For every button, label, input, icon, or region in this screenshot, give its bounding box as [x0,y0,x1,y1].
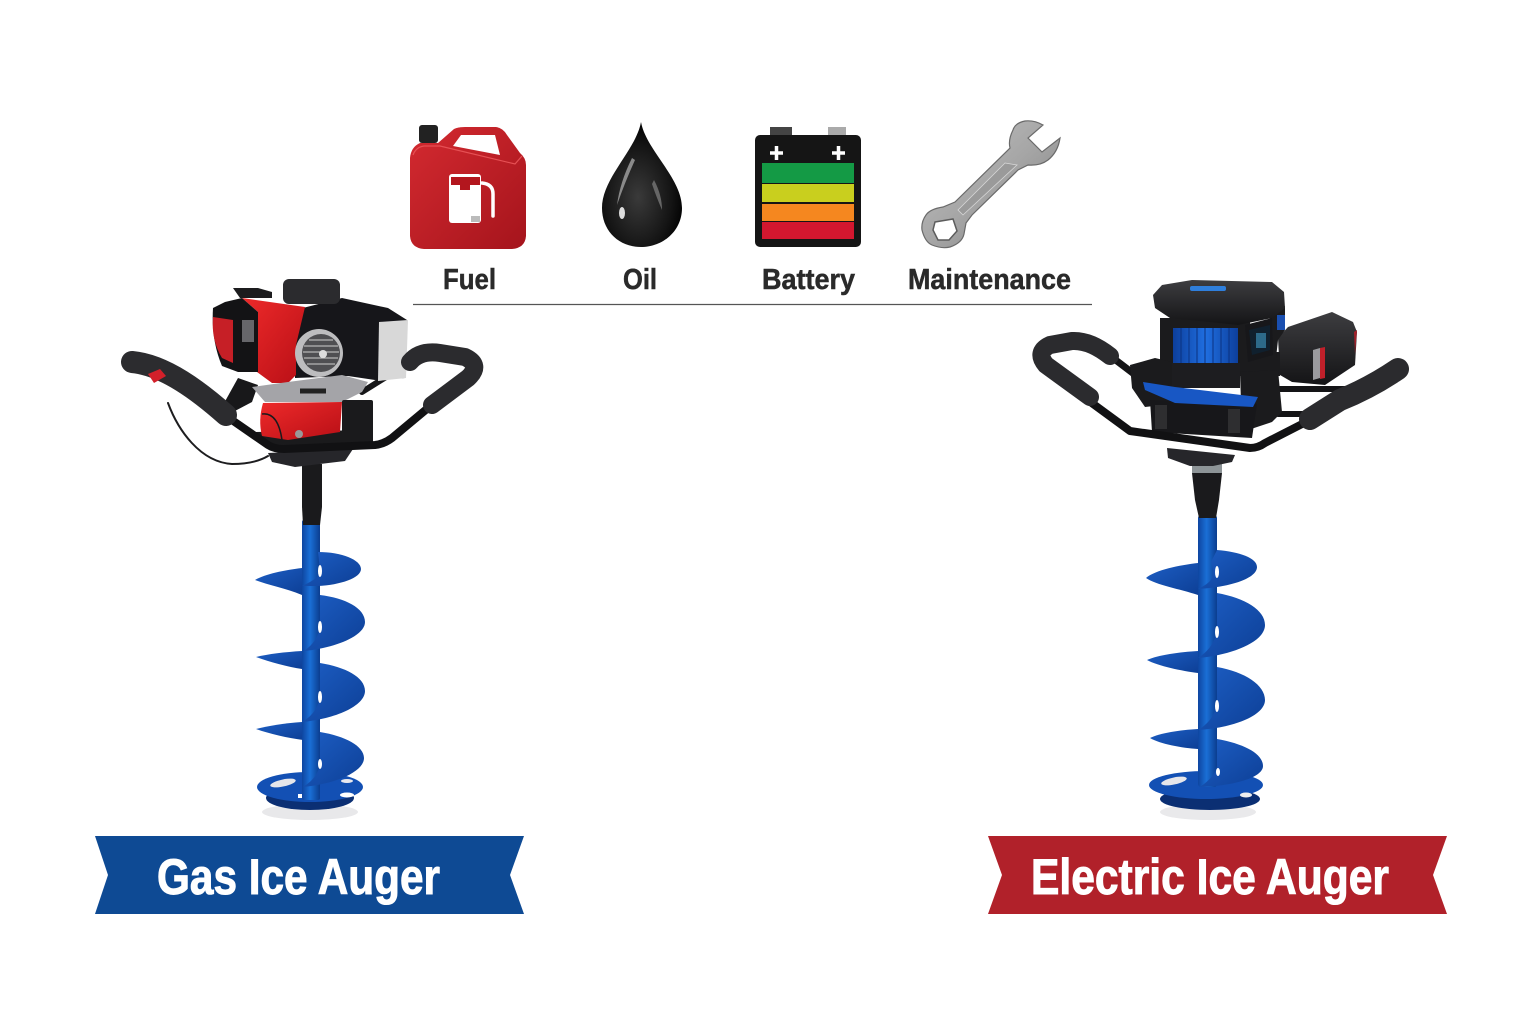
label: Battery: Battery [762,264,855,296]
banner: Electric Ice Auger: Electric Ice Auger [1031,849,1389,905]
label: Fuel: Fuel [443,264,496,296]
illustration: electric ice auger [1041,280,1398,820]
gas auger handlebar and grips [132,352,474,449]
label: Oil: Oil [623,264,657,296]
icon: battery [755,127,861,247]
icon: fuel can [410,125,526,249]
icon: oil drop [602,122,682,247]
electric auger handlebar and grips [1041,341,1398,448]
icon: wrench [922,121,1060,248]
electric auger coupling [1192,464,1222,518]
gas auger mounting plate [268,449,353,467]
electric auger blade and shaft [1146,515,1265,820]
electric auger rear tubes [1113,358,1353,414]
electric battery pack [1278,312,1357,385]
gas auger coupling [302,464,322,525]
icon row: consumables [410,121,1092,304]
electric motor housing [1130,280,1285,438]
electric auger mounting plate [1167,448,1235,466]
gas auger handlebar rear tubes and cable [168,362,410,464]
illustration: gas ice auger [132,279,474,820]
gas auger blade and shaft [255,520,365,820]
banner: Electric Ice Auger [988,836,1447,914]
banner: Gas Ice Auger [95,836,524,914]
label: Maintenance: Maintenance [908,264,1071,296]
gas engine [213,279,408,446]
banner: Gas Ice Auger: Gas Ice Auger [157,849,440,905]
